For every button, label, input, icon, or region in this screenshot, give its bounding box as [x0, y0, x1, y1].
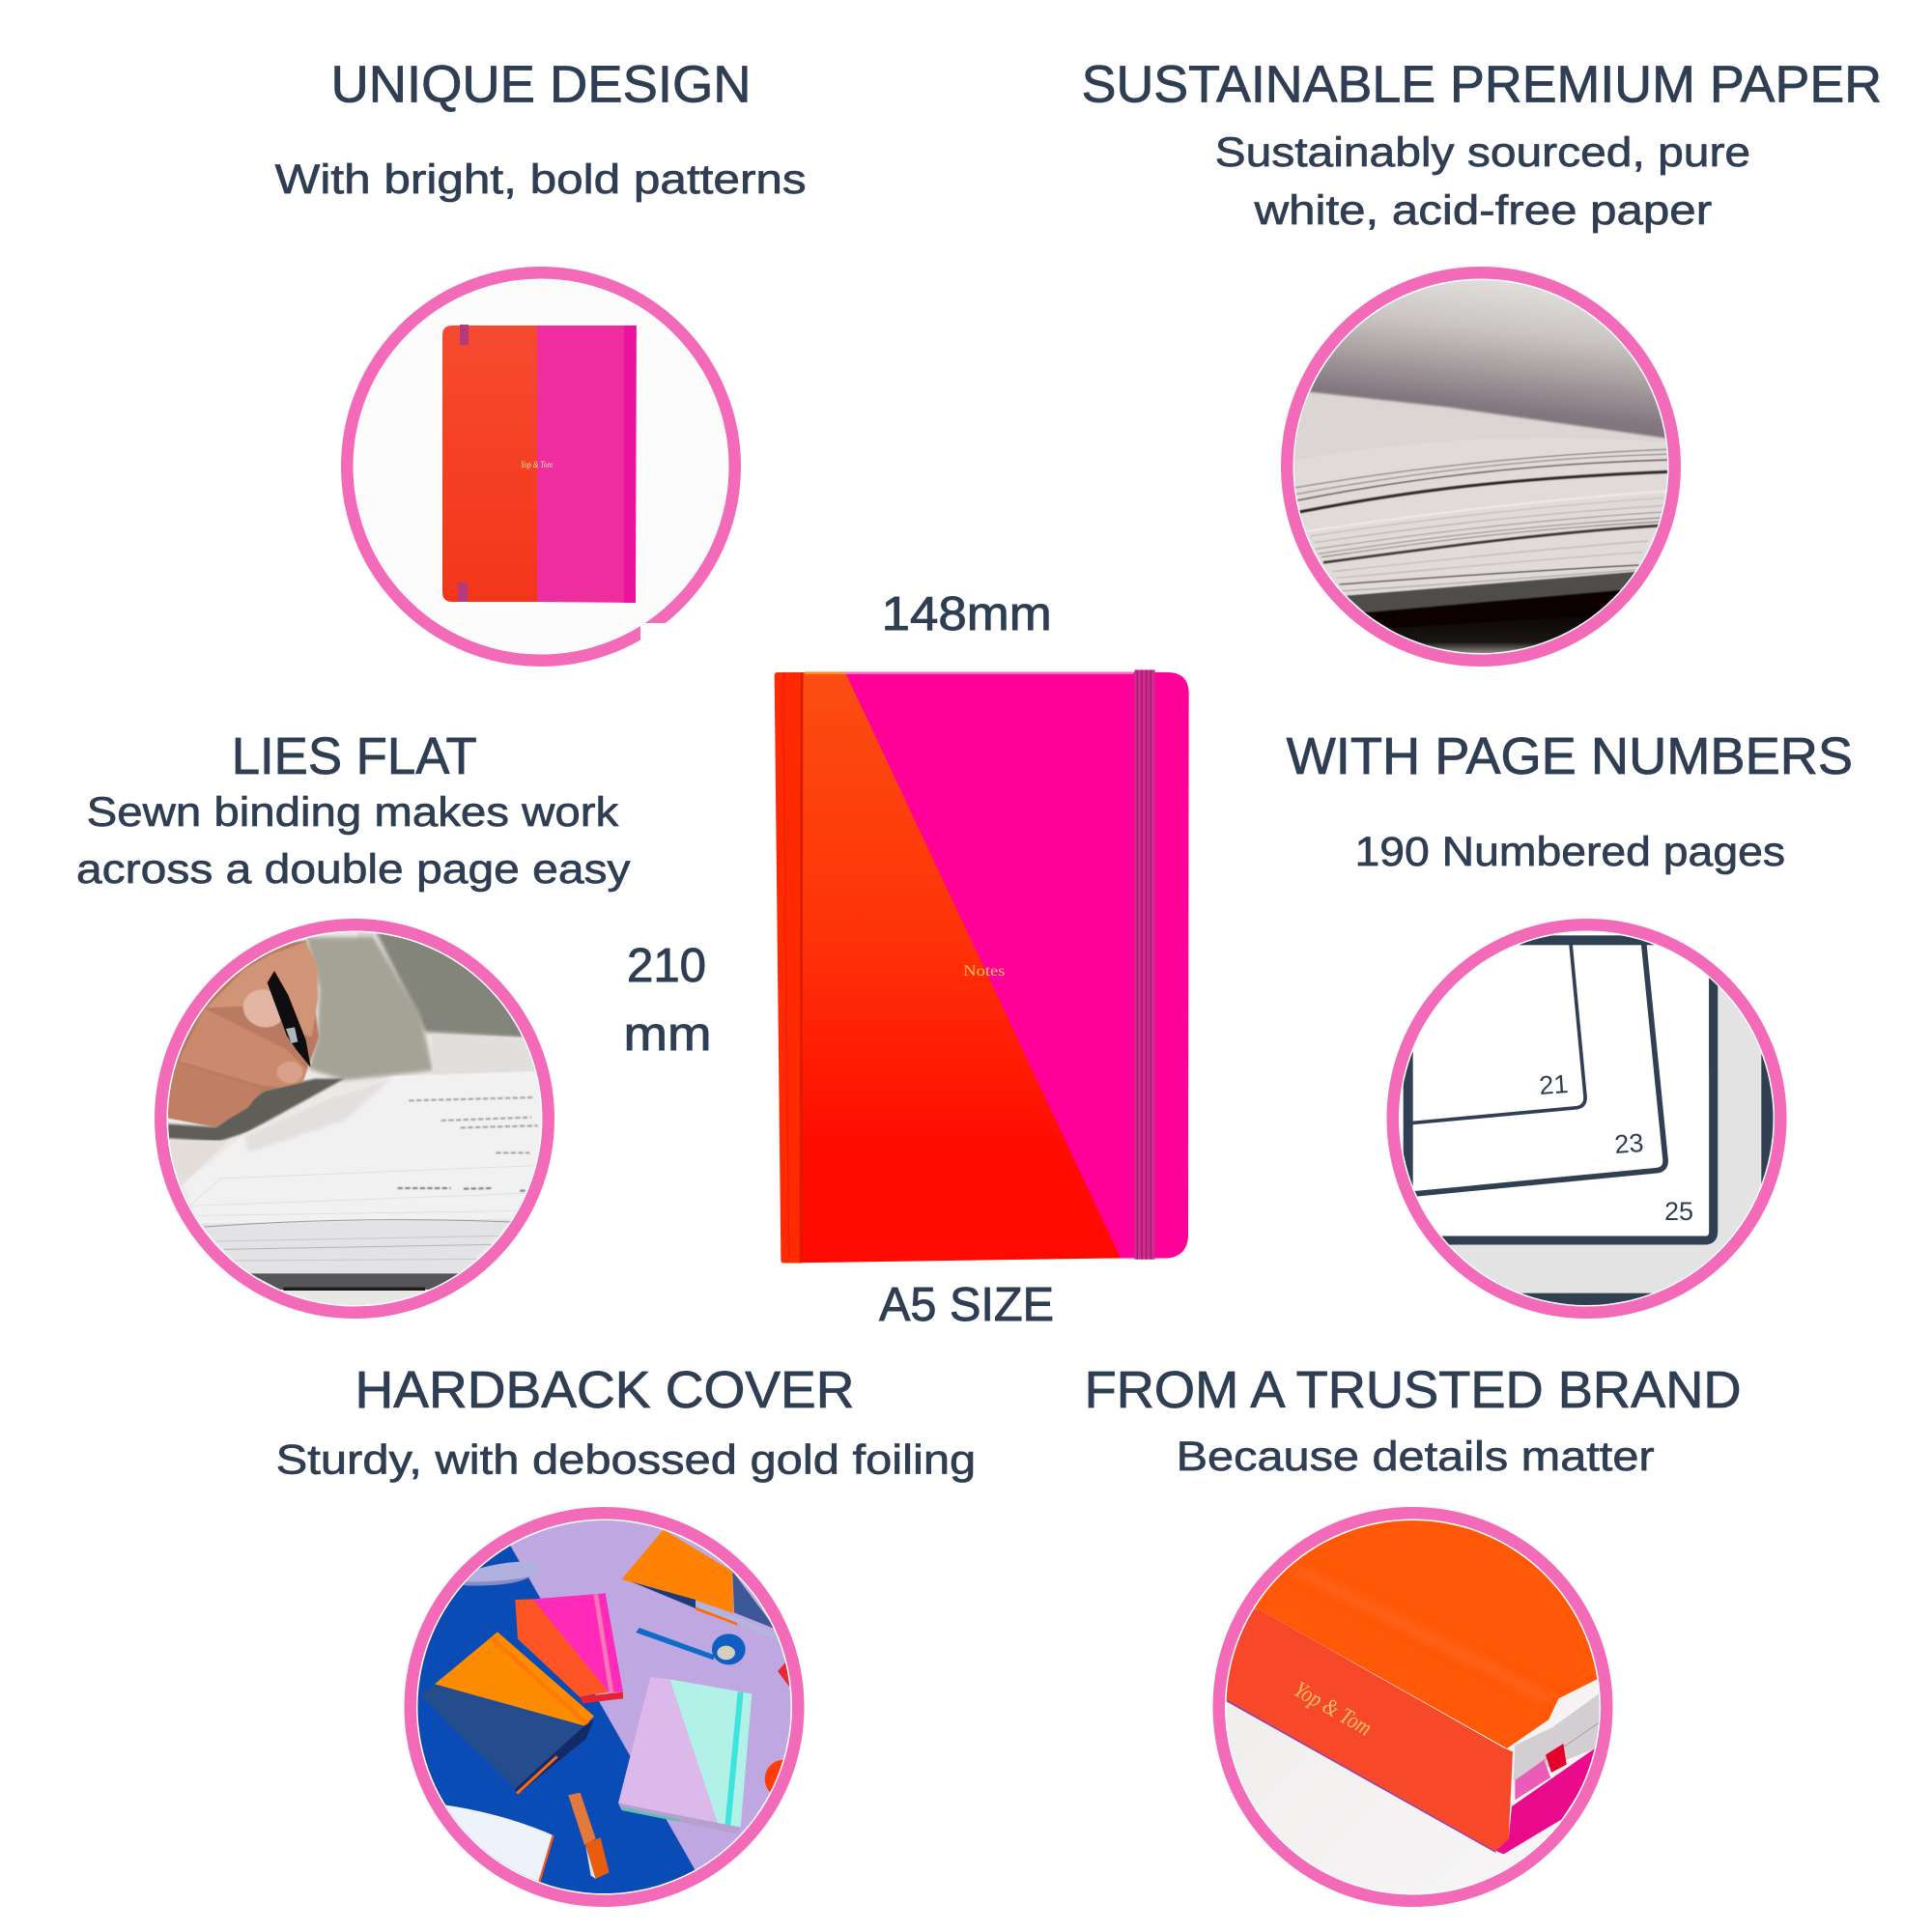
- photo: flatlay of notebooks: [417, 1520, 790, 1893]
- subtext: details matter: Because details matter: [1177, 1434, 1655, 1480]
- illustration: numbered pages: 25: [1664, 1197, 1693, 1226]
- ring notch: [640, 623, 700, 676]
- subtext: bright patterns: With bright, bold patterns: [275, 156, 807, 203]
- illustration: numbered pages: 21: [1538, 1069, 1569, 1100]
- subtext: acid free: white, acid-free paper: [1253, 187, 1712, 234]
- subtext: debossed gold: Sturdy, with debossed gold foiling: [276, 1436, 976, 1483]
- panel: hero notebook with dimensions: [624, 588, 1189, 1331]
- notebook cover: [775, 669, 1189, 1263]
- ring: trusted brand: [1219, 1513, 1606, 1901]
- dimension: height mm: mm: [624, 1009, 711, 1061]
- panel: hardback cover: [276, 1361, 976, 1916]
- illustration: numbered pages: [1403, 935, 1774, 1305]
- illustration: numbered pages: 23: [1613, 1128, 1644, 1159]
- dimension: height 210: 210: [627, 940, 706, 992]
- panel: sustainable paper: [1082, 56, 1882, 661]
- photo: back of notebook: [442, 325, 637, 603]
- ring: sustainable paper: [1287, 272, 1675, 661]
- ring: lies flat: [160, 924, 549, 1313]
- photo: hand writing: [168, 932, 541, 1305]
- panel: page numbers: [1287, 727, 1853, 1326]
- photo: back of notebook: Yop & Tom: [521, 460, 553, 469]
- label: a5 size: A5 SIZE: [879, 1279, 1054, 1331]
- subtext: sewn binding: Sewn binding makes work: [87, 789, 619, 836]
- heading: from a trusted brand: FROM A TRUSTED BRAND: [1085, 1361, 1742, 1419]
- photo: paper pages: [1294, 280, 1667, 653]
- panel: trusted brand: [1085, 1361, 1742, 1916]
- subtext: numbered pages: 190 Numbered pages: [1354, 829, 1785, 875]
- heading: sustainable premium paper: SUSTAINABLE PREMIUM PAPER: [1082, 56, 1882, 114]
- photo: notebook spine: [1227, 1520, 1600, 1893]
- subtext: double page: across a double page easy: [76, 846, 631, 893]
- heading: with page numbers: WITH PAGE NUMBERS: [1287, 727, 1853, 785]
- subtext: sustainably sourced: Sustainably sourced, pure: [1215, 129, 1750, 176]
- heading: unique design: UNIQUE DESIGN: [330, 56, 752, 114]
- photo: notebook spine: Yop & Tom: [1290, 1677, 1376, 1742]
- notebook cover: Notes: [963, 963, 1005, 980]
- dimension: width 148mm: 148mm: [882, 588, 1052, 640]
- ring: unique design: [347, 272, 735, 661]
- panel: unique design: [275, 56, 807, 676]
- panel: lies flat: [76, 727, 631, 1326]
- heading: lies flat: LIES FLAT: [232, 727, 477, 785]
- ring: hardback cover: [411, 1513, 798, 1901]
- heading: hardback cover: HARDBACK COVER: [355, 1361, 854, 1419]
- ring: page numbers: [1393, 924, 1780, 1313]
